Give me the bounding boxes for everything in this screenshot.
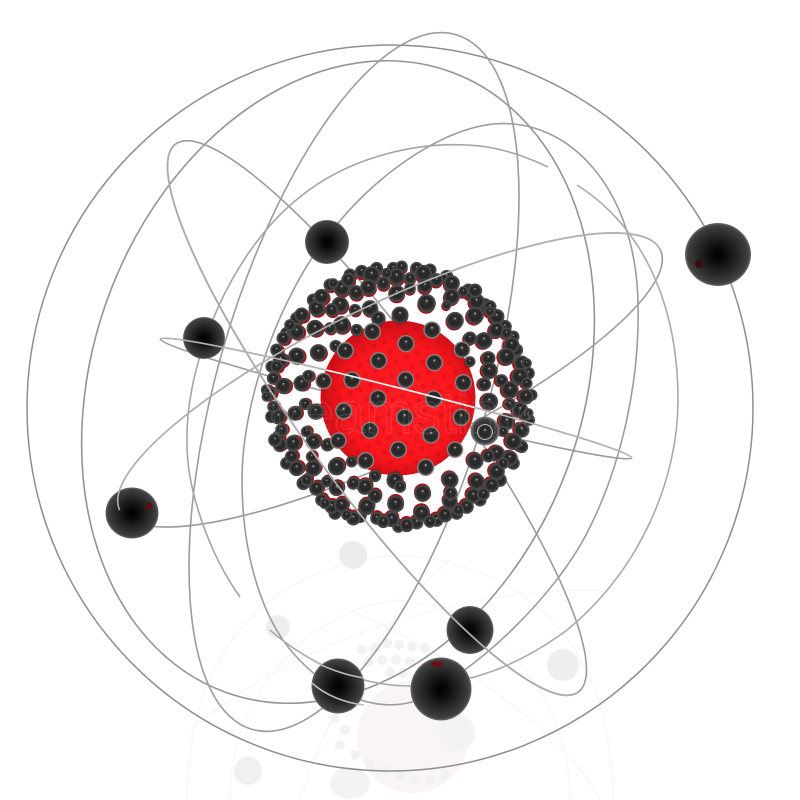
electron: top right [685,223,751,286]
electron: bottom centre [312,658,364,714]
orbit: diagonal loop [118,101,636,735]
electron: left [183,317,225,359]
nucleus: red sphere [320,320,476,476]
front arc: white highlight across nucleus [326,369,474,408]
faint floor reflection of the atom [187,541,613,800]
large electrons [106,220,751,720]
orbit: broken ring upper arc [187,145,548,597]
front arc: flat ellipse [160,328,634,458]
red reflection crescents [264,263,535,530]
front arc: diagonal loop [118,144,578,735]
electron: bottom right [446,606,494,654]
orbit: inner ring right [242,124,638,705]
electron: top centre [305,220,349,264]
electron: bottom front [410,658,472,720]
orbit: tall loop [122,0,586,767]
metal balls [262,261,537,532]
front arc: wide ellipse [87,181,660,510]
lower light segment across the bottom electron [312,683,364,705]
orbit: narrow flat ellipse [158,328,634,469]
watermark text: dreamstime [252,381,548,446]
orbit segments passing in front [87,144,660,735]
metal balls resting on the nucleus [316,322,471,475]
electron: far left [106,488,158,538]
orbit: wide tilted ellipse [87,181,693,579]
large ball inside the shell [470,416,500,446]
light segments across the bottom electron [312,660,364,678]
electron shell: small metallic balls [262,261,537,532]
orbit: broken ring lower arc [270,185,678,686]
